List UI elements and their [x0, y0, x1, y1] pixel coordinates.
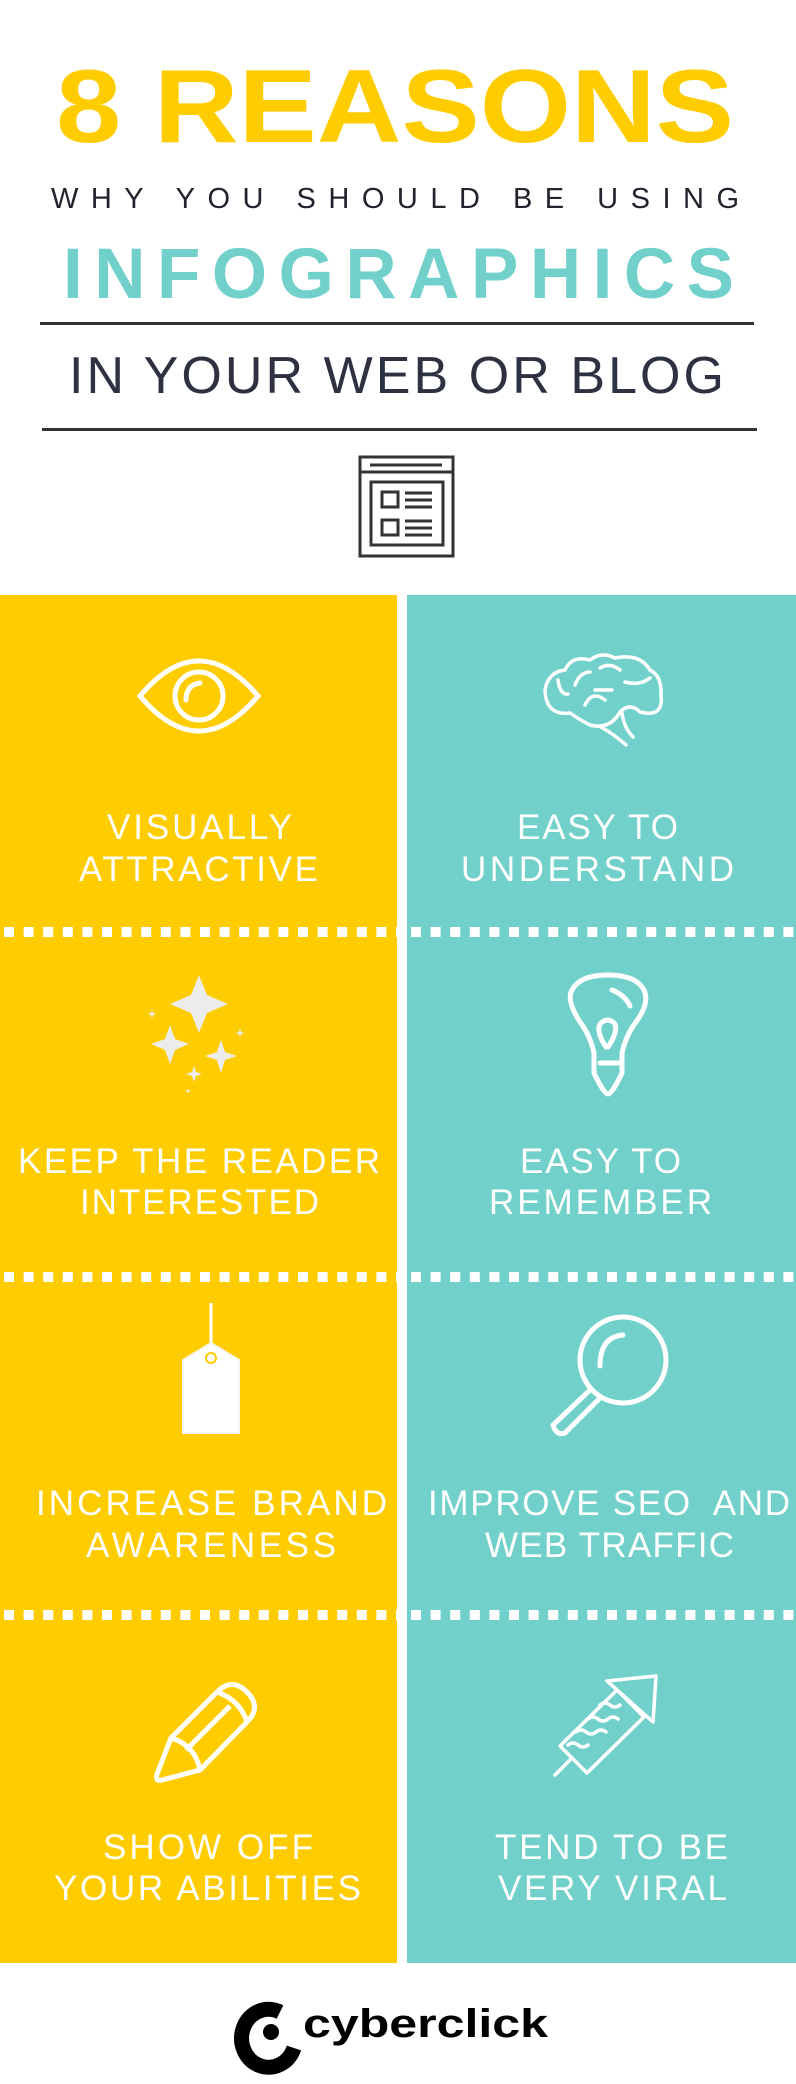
panel: teal column [407, 595, 796, 1963]
icon: rocket [555, 1676, 656, 1775]
text: easy to understand [461, 808, 734, 889]
text: tend to be very viral: TEND TO BE [495, 1828, 728, 1867]
text: show off your abilities [54, 1828, 361, 1908]
subtitle: WHY YOU SHOULD BE USING [51, 183, 739, 215]
panel: yellow column [0, 595, 397, 1963]
text: keep the reader interested [18, 1142, 380, 1222]
text: easy to remember: REMEMBER [489, 1183, 712, 1222]
icon: sparkles [147, 975, 245, 1092]
text: easy to remember [489, 1142, 712, 1222]
text: keep the reader interested: INTERESTED [80, 1183, 319, 1222]
icon: pencil [157, 1684, 254, 1780]
text: visually attractive: VISUALLY [107, 808, 292, 847]
text: keep the reader interested: KEEP THE READER [18, 1142, 380, 1181]
icon: brain [545, 655, 661, 745]
text: tend to be very viral [495, 1828, 728, 1908]
text: easy to understand: EASY TO [517, 808, 678, 847]
text: visually attractive [79, 808, 318, 889]
text: increase brand awareness [36, 1484, 387, 1565]
subheading: IN YOUR WEB OR BLOG [69, 347, 724, 405]
text: improve seo and web traffic: WEB TRAFFIC [485, 1526, 734, 1565]
heading: infographics: INFOGRAPHICS [63, 235, 734, 314]
text: visually attractive: ATTRACTIVE [79, 850, 318, 889]
text: easy to remember: EASY TO [520, 1142, 681, 1181]
logo: cyberclick: cyberclick [303, 2002, 549, 2046]
icon: eye [140, 661, 258, 731]
text: increase brand awareness: INCREASE BRAND [36, 1484, 387, 1523]
text: improve seo and web traffic [428, 1484, 790, 1565]
icon: tag [183, 1303, 239, 1433]
icon: magnifier [553, 1317, 666, 1434]
title: 8 REASONS [56, 49, 734, 165]
logo: cyberclick [242, 2002, 549, 2067]
text: increase brand awareness: AWARENESS [86, 1526, 336, 1565]
text: show off your abilities: SHOW OFF [103, 1828, 313, 1867]
icon: web page [360, 457, 453, 556]
text: tend to be very viral: VERY VIRAL [498, 1869, 727, 1908]
icon: light bulb [570, 975, 646, 1094]
text: improve seo and web traffic: IMPROVE SEO AND [428, 1484, 790, 1523]
text: show off your abilities: YOUR ABILITIES [54, 1869, 361, 1908]
text: easy to understand: UNDERSTAND [461, 850, 734, 889]
